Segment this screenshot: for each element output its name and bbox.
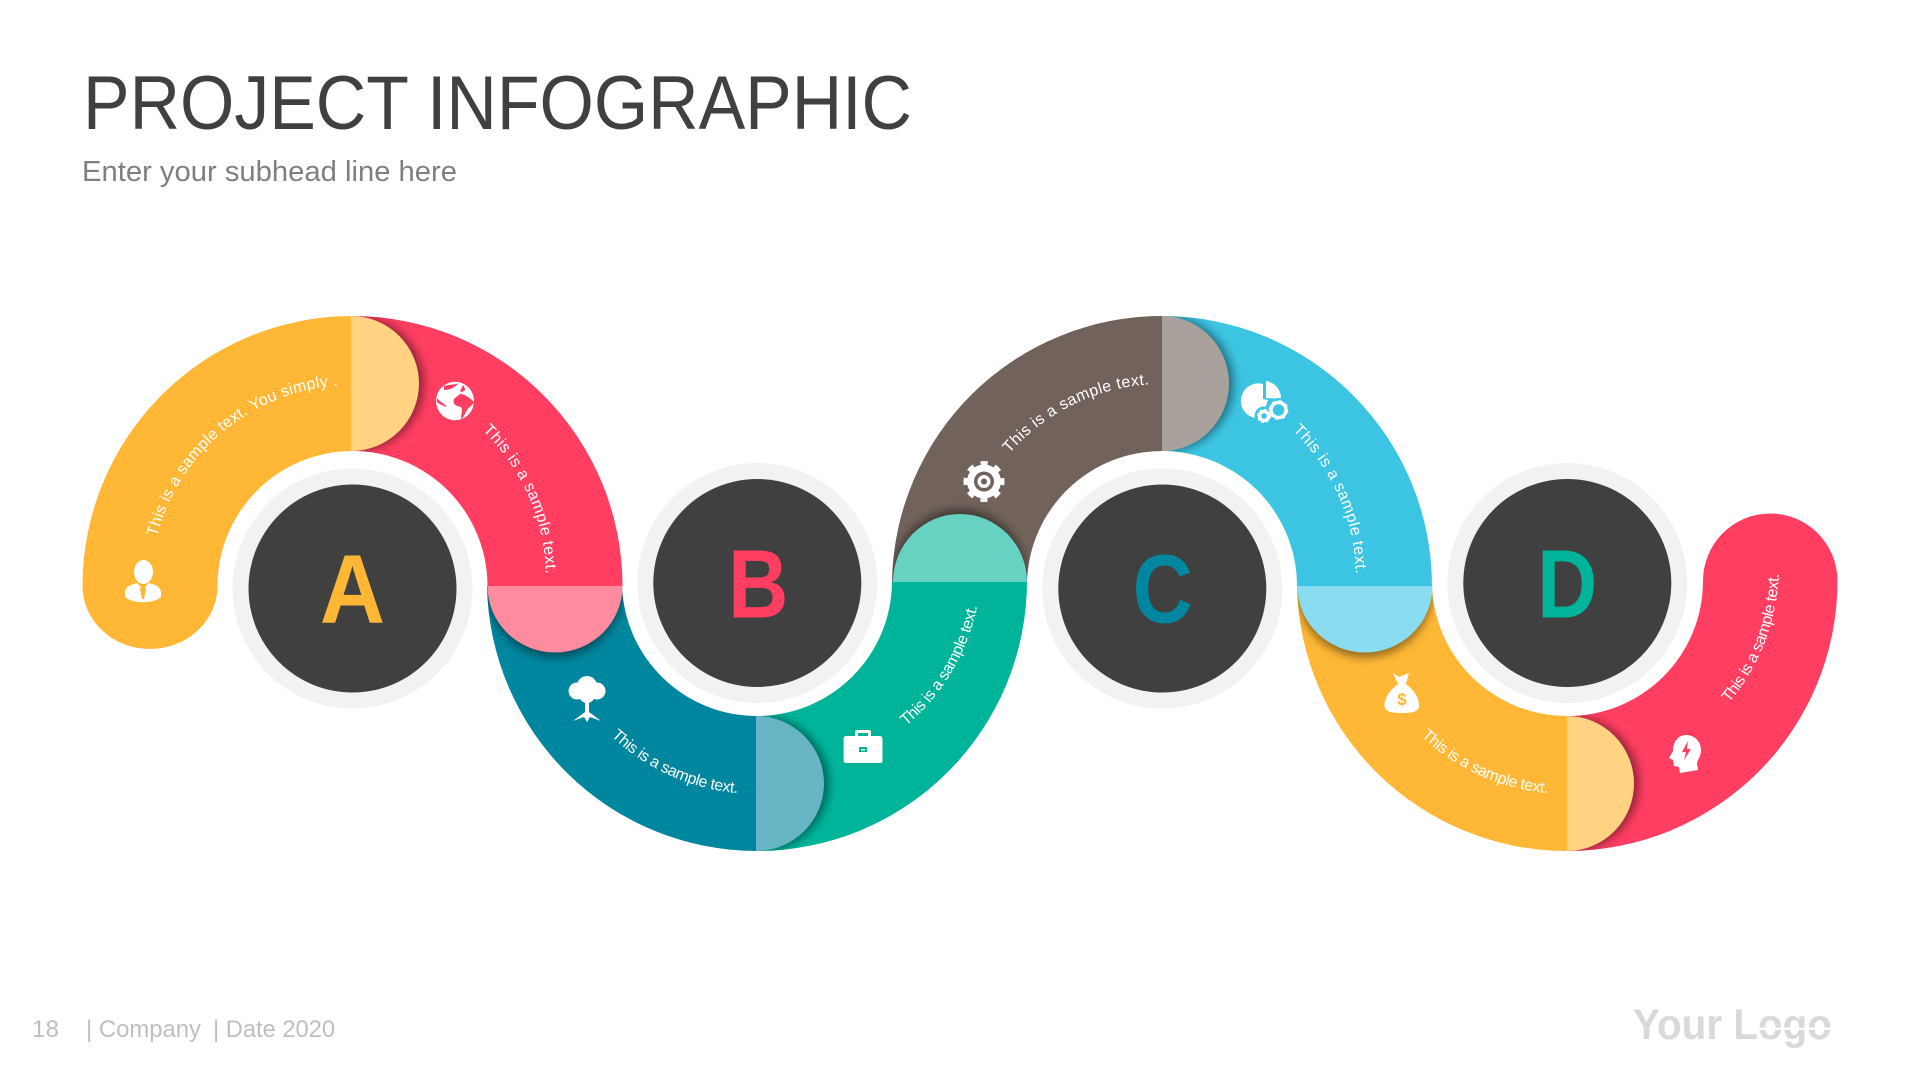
cap: light blue [1298, 586, 1432, 658]
text: red arch: This is a sample text. [486, 422, 556, 572]
icon: tree [568, 676, 606, 722]
text: yellow arch: This is a sample text. You simply . [146, 376, 336, 534]
segment: teal arch with tree icon [487, 586, 756, 851]
badge D [1447, 463, 1687, 703]
text: brown arch: This is a sample text. [1002, 374, 1148, 450]
badge D: D [1537, 530, 1597, 639]
cap: light yellow [351, 316, 424, 451]
text: blue arch: This is a sample text. [1296, 422, 1366, 572]
icon: briefcase [844, 730, 882, 763]
segment: second red arch with head icon [1568, 514, 1838, 851]
cap: light green [893, 509, 1027, 582]
icon: gear [966, 463, 1002, 500]
icon: head with bolt [1669, 735, 1701, 773]
badge C [1042, 468, 1282, 708]
footer: page number: 18 [32, 1016, 59, 1043]
segment: red arch with globe icon [352, 316, 622, 586]
cap: pink [488, 586, 622, 658]
text: second red arch: This is a sample text. [1720, 575, 1779, 700]
segment: yellow arch with person icon [82, 316, 351, 649]
icon: pie chart with gears [1241, 381, 1290, 426]
cap: light teal [756, 716, 829, 851]
badge C: C [1133, 536, 1193, 644]
icon: money bag [1384, 673, 1419, 713]
segment: brown arch with gear icon [892, 316, 1162, 581]
title: PROJECT INFOGRAPHIC [83, 61, 912, 146]
logo: Your Logo [1633, 1001, 1832, 1049]
footer: company: | Company [86, 1016, 201, 1043]
cap: light brown [1162, 316, 1234, 451]
icon: person [125, 560, 161, 602]
cap: second light yellow [1567, 716, 1639, 851]
subhead: Enter your subhead line here [82, 156, 457, 188]
badge A: A [320, 535, 385, 643]
footer: date: | Date 2020 [213, 1016, 335, 1043]
badge A [232, 468, 472, 708]
segment: green arch with briefcase icon [757, 581, 1027, 851]
badge B [637, 463, 877, 703]
text: teal arch: This is a sample text. [614, 728, 736, 793]
icon: globe [436, 382, 474, 420]
segment: second yellow arch with money bag icon [1297, 586, 1567, 851]
badge B: B [728, 530, 788, 639]
text: second yellow arch: This is a sample text. [1424, 728, 1546, 793]
text: green arch: This is a sample text. [899, 607, 977, 724]
icon: money bag: $ [1397, 690, 1407, 709]
segment: blue arch with chart-gears icon [1162, 316, 1432, 586]
